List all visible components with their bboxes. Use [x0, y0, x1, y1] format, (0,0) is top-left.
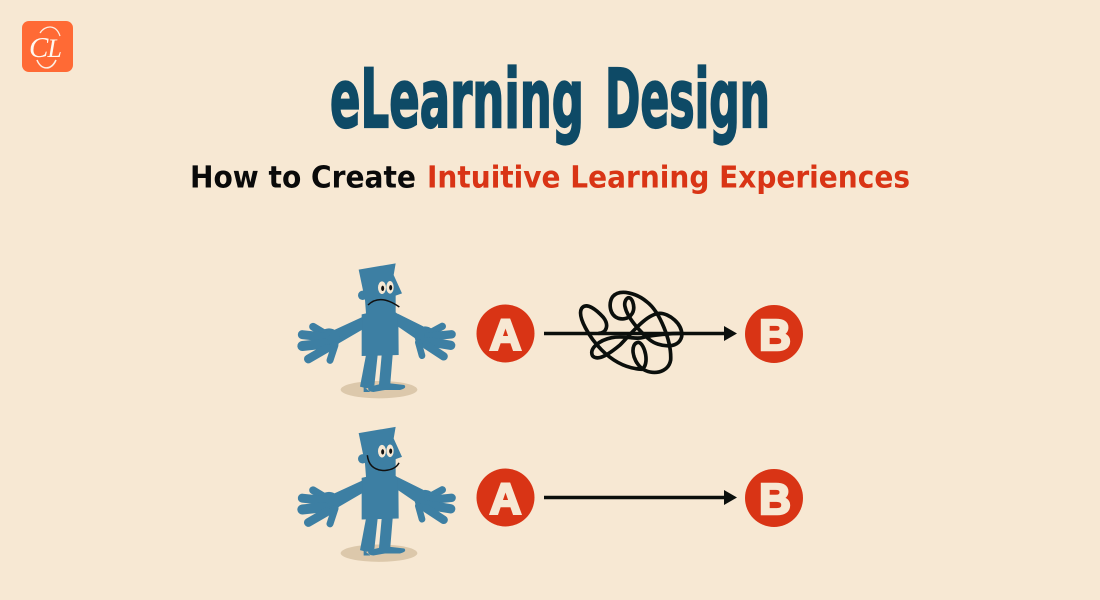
point A, row 2	[476, 468, 534, 526]
straight arrow, row 2	[544, 490, 737, 505]
point B, row 2	[745, 469, 803, 527]
title: Design	[605, 53, 770, 147]
point B, row 1	[745, 305, 803, 363]
logo: CL badge: C	[29, 32, 49, 64]
point A, row 1	[476, 304, 534, 362]
tangled arrow, row 1	[544, 292, 737, 372]
subtitle	[190, 160, 910, 196]
character: happy figure	[302, 427, 452, 562]
subtitle: How to Create	[190, 160, 416, 196]
point A, row 2: A	[490, 474, 521, 524]
scribble	[581, 292, 683, 372]
logo: CL badge: L	[46, 34, 62, 63]
point B, row 2: B	[759, 475, 791, 524]
point A, row 1: A	[490, 310, 521, 360]
subtitle: Intuitive Learning Experiences	[427, 160, 910, 196]
point B, row 1: B	[759, 311, 791, 360]
character: confused figure	[302, 263, 452, 398]
logo: CL badge	[22, 21, 73, 72]
title: eLearning	[330, 53, 584, 147]
